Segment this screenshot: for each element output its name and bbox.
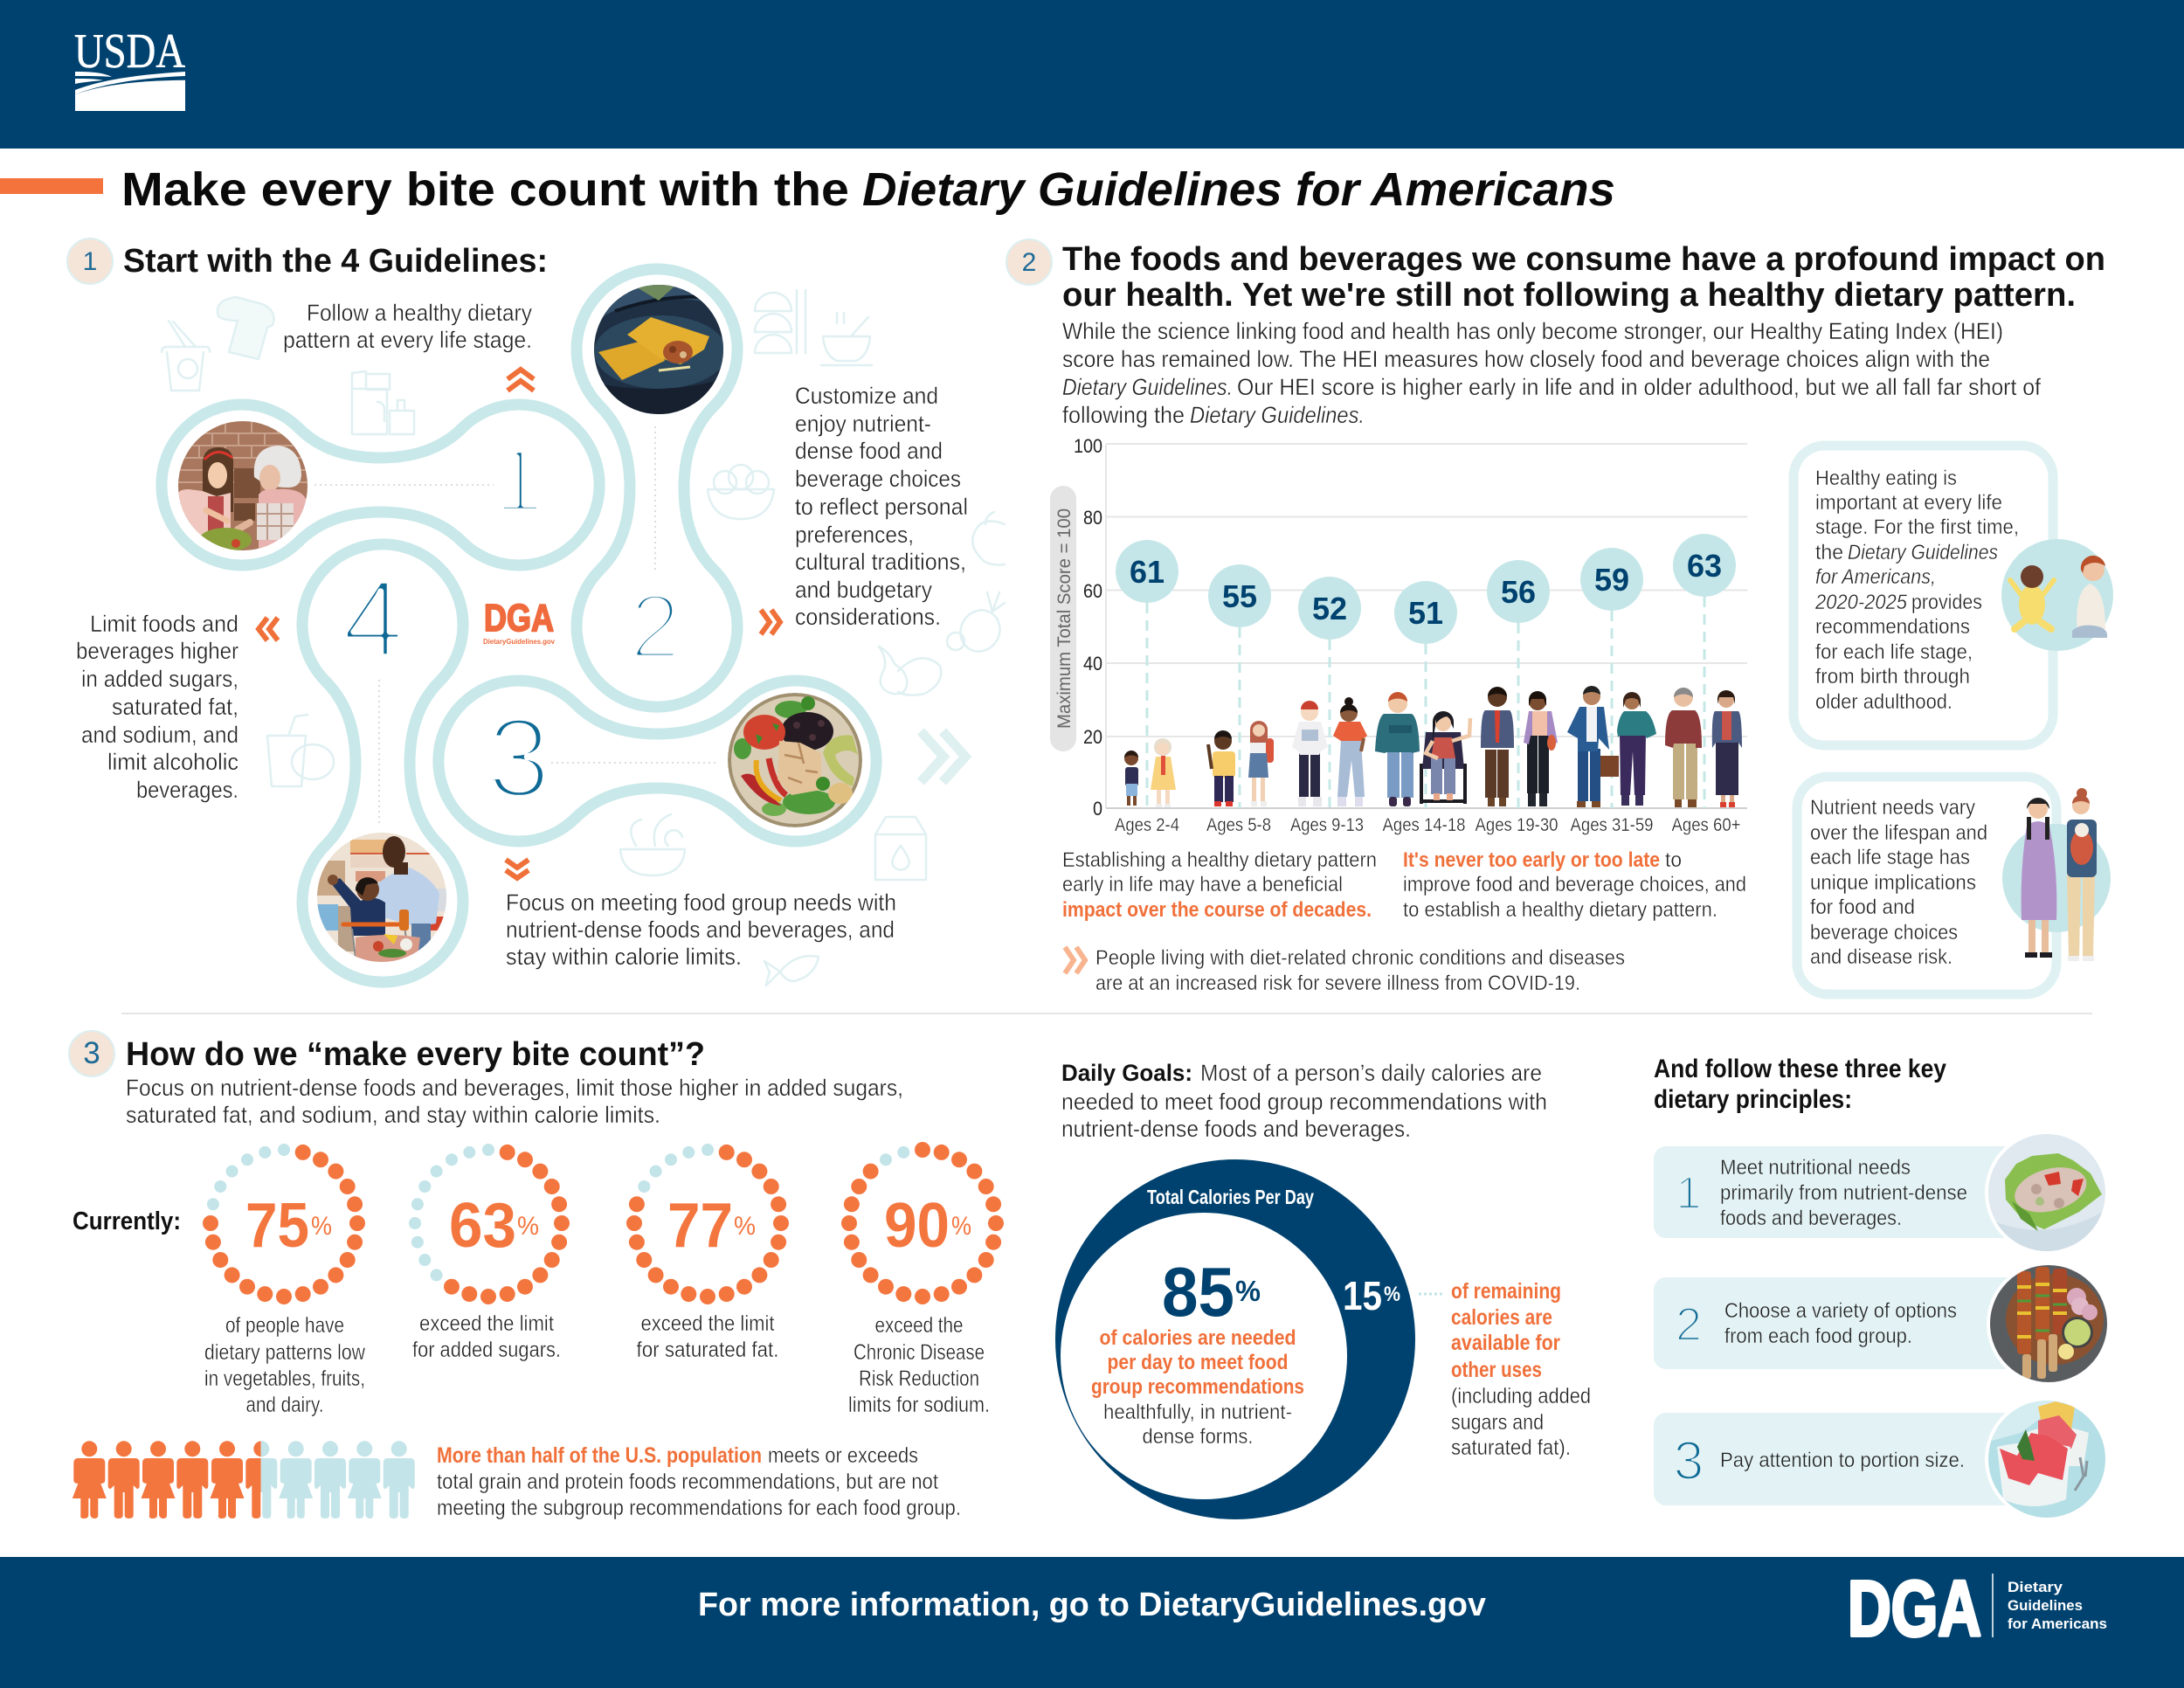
icon: pear and mango [879, 647, 941, 695]
heading: how do we make every bite count: How do we “make every bite count”? [126, 1036, 705, 1073]
text: guideline 2: enjoy nutrient- [795, 411, 931, 437]
text: guideline 1: pattern at every life stage. [283, 327, 532, 353]
score bubble 59: 59 [1594, 562, 1629, 598]
callout text: for Americans, [1815, 565, 1936, 589]
callout text [1814, 467, 2019, 714]
score bubble 52 [1298, 577, 1361, 640]
people: ages 19-30 [1481, 687, 1558, 806]
card: principle 1 [1654, 1131, 2109, 1255]
score bubble 56: 56 [1501, 574, 1536, 610]
text: never too early: to [1665, 848, 1682, 872]
y-axis title pill: Maximum Total Score = 100 [1054, 508, 1075, 729]
dot ring 90 percent: 90 [884, 1191, 950, 1261]
dot ring 90 percent: % [951, 1212, 971, 1241]
badge 1: 1 [83, 247, 97, 276]
card: principle 3 [1654, 1397, 2109, 1521]
text: more than half [437, 1443, 961, 1520]
intro paragraph: Dietary Guidelines. [1062, 374, 1233, 400]
badge 3 [69, 1031, 114, 1076]
heading: three key principles: dietary principles: [1654, 1085, 1852, 1114]
heading: three key principles: And follow these three key [1654, 1055, 1946, 1083]
footer DGA logo: for Americans [2008, 1615, 2107, 1632]
text: 85 percent explanation: dense forms. [1143, 1425, 1253, 1449]
y-axis tick labels: 60 [1083, 580, 1102, 602]
card: principle 2 [1654, 1262, 2111, 1386]
score bubble 56 [1487, 560, 1550, 623]
y-axis tick labels [1074, 435, 1102, 820]
subheading: saturated fat, and sodium, and stay within calorie limits. [126, 1102, 660, 1128]
dot ring 63 percent: 63 [449, 1191, 516, 1261]
number 3: 3 [487, 694, 550, 821]
card: principle 2: 2 [1676, 1298, 1702, 1351]
icon: groceries [352, 371, 414, 434]
score bubble 55: 55 [1222, 578, 1257, 614]
icon: yogurt cup [162, 321, 210, 391]
stat 15 percent: 15 [1343, 1273, 1382, 1318]
arrow: up chevrons [508, 370, 534, 391]
people: ages 5-8 [1208, 721, 1274, 806]
intro paragraph: Our HEI score is higher early in life and in older adulthood, but we all fall far short of [1237, 374, 2041, 400]
footer DGA logo: DGA [1848, 1566, 1981, 1653]
text: guideline 4 [76, 611, 238, 803]
footer banner [0, 1557, 2184, 1688]
text: guideline 2: to reflect personal [795, 494, 968, 520]
photo: lettuce wrap [1985, 1131, 2109, 1255]
subheading: Focus on nutrient-dense foods and beverages, limit those higher in added sugars, [126, 1075, 903, 1101]
text: remaining calories: other uses [1451, 1358, 1542, 1382]
icon: light orange chevrons [1065, 947, 1085, 973]
guideline loop 1 [162, 405, 599, 565]
panel: section 2 health impact [1006, 239, 2113, 995]
callout: nutrient needs vary [1797, 777, 2111, 994]
chart: calories circle [1055, 1159, 1415, 1519]
text: daily goals: nutrient-dense foods and beverages. [1061, 1116, 1411, 1142]
y-axis tick labels: 40 [1083, 653, 1102, 675]
caption: 63 percent: for added sugars. [412, 1338, 561, 1362]
card: principle 1: 1 [1676, 1168, 1701, 1219]
caption: 63 percent [412, 1311, 561, 1362]
y-axis tick labels: 100 [1074, 435, 1102, 457]
label: currently: Currently: [73, 1207, 181, 1235]
score bubble 61: 61 [1130, 554, 1165, 590]
photo: tamales [594, 285, 727, 414]
text: guideline 4: beverages. [136, 777, 238, 803]
text: remaining calories: calories are [1451, 1305, 1552, 1330]
callout text: for each life stage, [1815, 640, 1973, 664]
callout text: beverage choices [1810, 921, 1958, 944]
dot ring 75 percent: % [311, 1212, 332, 1241]
DGA centre logo: DGA [484, 597, 554, 640]
text: establishing a healthy pattern: Establishing a healthy dietary pattern [1062, 848, 1377, 872]
callout text: and disease risk. [1810, 945, 1952, 969]
callout text: older adulthood. [1815, 690, 1952, 714]
badge 2 [1006, 239, 1052, 285]
main title: Dietary Guidelines for Americans [862, 163, 1615, 216]
text: never too early: improve food and beverage choices, and [1403, 873, 1746, 896]
caption: 75 percent: in vegetables, fruits, [204, 1366, 365, 1391]
x-axis age labels: Ages 9-13 [1290, 815, 1364, 835]
callout text: important at every life [1815, 491, 2002, 515]
people: ages 9-13 [1292, 697, 1367, 806]
guideline loop 4 [302, 544, 463, 982]
callout: healthy eating life stages [1794, 446, 2113, 745]
dot ring 75 percent: 75 [245, 1191, 309, 1261]
callout text [1810, 796, 1987, 969]
people: ages 31-59 [1567, 686, 1656, 807]
footer DGA logo: Guidelines [2008, 1597, 2083, 1614]
text: more than half: More than half of the U.S. population [437, 1443, 762, 1468]
text: guideline 2: beverage choices [795, 466, 961, 492]
DGA centre logo: DietaryGuidelines.gov [483, 638, 556, 646]
icon: chevrons [921, 731, 965, 782]
number 4: 4 [342, 557, 404, 681]
intro paragraph: While the science linking food and health has only become stronger, our Healthy Eating Index (HEI) [1062, 318, 2003, 344]
icon: row of ten people [73, 1441, 415, 1519]
text: remaining calories: (including added [1451, 1384, 1591, 1408]
text: guideline 4: in added sugars, [81, 666, 238, 692]
photo: grandmother and girl cooking [178, 421, 308, 552]
card: principle 2: from each food group. [1724, 1325, 1912, 1348]
arrow: left chevrons [259, 618, 278, 640]
footer DGA logo [1848, 1566, 2107, 1653]
text: 85 percent explanation: of calories are needed [1099, 1326, 1296, 1350]
text: more than half: meeting the subgroup recommendations for each food group. [437, 1496, 961, 1520]
illustration: pregnant woman and mother with baby [2022, 788, 2097, 961]
faint food icons [162, 290, 1007, 986]
photo: watermelon cups [1985, 1397, 2109, 1521]
text: 85 percent explanation: group recommendations [1091, 1375, 1304, 1399]
caption: 75 percent [204, 1313, 366, 1417]
card: principle 3: 3 [1674, 1431, 1704, 1491]
stat 85 percent: 85 [1162, 1253, 1234, 1331]
icon: fish [764, 956, 819, 986]
dot ring 63 percent: % [517, 1212, 539, 1241]
caption: 77 percent: for saturated fat. [636, 1338, 779, 1362]
badge 1 [67, 239, 113, 284]
score bubble 55 [1208, 564, 1271, 627]
callout text: for food and [1810, 896, 1915, 919]
x-axis age labels [1115, 815, 1740, 835]
heading: profound impact: The foods and beverages we consume have a profound impact on [1062, 241, 2105, 278]
chart: HEI score by age [1050, 435, 1747, 835]
intro paragraph: following the [1062, 402, 1185, 428]
caption: 77 percent [636, 1311, 779, 1362]
icon: dumplings and chopsticks [755, 290, 805, 353]
arrow: down chevrons [506, 860, 529, 878]
icon: pineapple [947, 592, 1007, 659]
text: 85 percent explanation: per day to meet food [1108, 1351, 1288, 1374]
text: guideline 2: dense food and [795, 438, 943, 464]
score bubble 61 [1116, 540, 1178, 603]
text: 85 percent explanation: healthfully, in nutrient- [1103, 1401, 1292, 1424]
number 2: 2 [630, 576, 681, 678]
icon: milk carton [875, 817, 926, 880]
dot ring 77 percent: % [734, 1212, 756, 1241]
caption: 90 percent: Risk Reduction [859, 1366, 979, 1391]
card: principle 2: Choose a variety of options [1724, 1299, 1957, 1323]
card: principle 3: Pay attention to portion size. [1720, 1449, 1965, 1472]
text: guideline 1: Follow a healthy dietary [307, 300, 532, 326]
people: ages 60+ [1665, 688, 1742, 807]
heading: three key principles [1654, 1055, 1946, 1114]
orange title accent bar [0, 178, 103, 194]
text: guideline 2: Customize and [795, 383, 938, 409]
callout text: Nutrient needs vary [1810, 796, 1975, 820]
photo: salad bowl [728, 693, 862, 827]
text: COVID-19 note [1095, 946, 1625, 995]
caption: 75 percent: dietary patterns low [204, 1340, 366, 1365]
text: establishing a healthy pattern: impact over the course of decades. [1062, 898, 1372, 922]
x-axis age labels: Ages 14-18 [1382, 815, 1466, 835]
text: guideline 4: and sodium, and [81, 722, 238, 748]
text: never too early: to establish a healthy dietary pattern. [1403, 898, 1717, 922]
score bubble 51 [1394, 581, 1457, 644]
x-axis age labels: Ages 2-4 [1115, 815, 1179, 835]
card: principle 1: Meet nutritional needs [1720, 1156, 1911, 1180]
score bubble 51: 51 [1408, 595, 1443, 631]
panel: section 1 guidelines [67, 239, 1007, 986]
text: more than half: meets or exceeds [768, 1443, 918, 1468]
caption: 75 percent: of people have [225, 1313, 344, 1338]
badge 2: 2 [1022, 248, 1036, 277]
callout text: from birth through [1815, 665, 1970, 688]
panel: section 3 make every bite count [69, 1031, 2111, 1521]
text: daily goals: Daily Goals: [1061, 1060, 1192, 1086]
guideline loop 2 [577, 269, 737, 707]
caption: 77 percent: exceed the limit [641, 1311, 775, 1336]
y-axis tick labels: 20 [1083, 726, 1102, 748]
x-axis age labels: Ages 31-59 [1571, 815, 1653, 835]
callout text: stage. For the first time, [1815, 515, 2019, 539]
caption: 75 percent: and dairy. [246, 1393, 323, 1417]
text: more than half: total grain and protein foods recommendations, but are not [437, 1470, 938, 1494]
intro paragraph: score has remained low. The HEI measures how closely food and beverage choices align with the [1062, 346, 1990, 372]
text: guideline 2: considerations. [795, 604, 941, 630]
text: remaining calories: saturated fat). [1451, 1435, 1571, 1460]
text: guideline 4: beverages higher [76, 638, 238, 664]
text: guideline 4: Limit foods and [90, 611, 238, 637]
text: never too early [1403, 848, 1746, 922]
callout text: unique implications [1810, 871, 1976, 895]
USDA logo: USDA [74, 24, 185, 79]
callout text: recommendations [1815, 615, 1970, 639]
icon: drink and lemon [267, 715, 334, 786]
guideline loop 3 [439, 681, 876, 841]
icon: soup bowl [821, 313, 872, 365]
text: guideline 3: Focus on meeting food group needs with [506, 889, 896, 916]
callout text: the [1815, 541, 1843, 564]
text: never too early: It's never too early or too late [1403, 848, 1660, 872]
icon: apple [972, 512, 1005, 564]
callout text: over the lifespan and [1810, 821, 1987, 845]
dot ring 75 percent [211, 1150, 357, 1297]
text: guideline 4: limit alcoholic [107, 749, 238, 775]
photo: father and son shopping [317, 833, 446, 962]
score bubble 52: 52 [1312, 591, 1347, 626]
main title: Make every bite count with the [121, 163, 849, 216]
intro paragraph: Dietary Guidelines. [1190, 402, 1365, 428]
stat 15 percent: % [1384, 1283, 1400, 1306]
callout text: each life stage has [1810, 846, 1970, 869]
subheading [126, 1075, 903, 1128]
text: establishing a healthy pattern [1062, 848, 1377, 922]
person in wheelchair [1421, 711, 1470, 804]
text: guideline 2: and budgetary [795, 577, 932, 603]
callout text: provides [1911, 591, 1982, 614]
stat 85 percent: % [1235, 1275, 1261, 1307]
text: remaining calories: sugars and [1451, 1410, 1544, 1435]
text: guideline 3: stay within calorie limits. [506, 944, 742, 970]
x-axis age labels: Ages 19-30 [1475, 815, 1559, 835]
caption: 63 percent: exceed the limit [419, 1311, 554, 1336]
text: COVID-19 note: are at an increased risk for severe illness from COVID-19. [1095, 972, 1580, 995]
main title [121, 163, 1615, 216]
photo: skewers [1987, 1262, 2111, 1386]
text: guideline 1 [283, 300, 532, 353]
heading: profound impact: our health. Yet we're still not following a healthy dietary pattern. [1062, 277, 2076, 314]
caption: 90 percent: Chronic Disease [854, 1340, 985, 1365]
y-axis title pill [1050, 486, 1076, 751]
dot ring 90 percent [849, 1150, 996, 1297]
score bubble 63 [1673, 534, 1736, 597]
y-axis tick labels: 0 [1093, 798, 1102, 820]
text: establishing a healthy pattern: early in life may have a beneficial [1062, 873, 1343, 896]
text: daily goals [1061, 1060, 1547, 1142]
chart: calories circle: Total Calories Per Day [1147, 1186, 1314, 1208]
card: principle 1: foods and beverages. [1720, 1207, 1902, 1230]
illustration: baby and toddler [2010, 556, 2107, 638]
people: ages 2-4 [1124, 738, 1176, 807]
dot ring 77 percent [634, 1150, 781, 1297]
text: remaining calories [1451, 1279, 1591, 1460]
people: ages 14-18 [1375, 692, 1470, 806]
footer DGA logo: Dietary [2008, 1579, 2063, 1595]
intro paragraph [1062, 318, 2041, 428]
number 1: 1 [494, 431, 543, 530]
callout text: 2020-2025 [1814, 591, 1908, 614]
text: COVID-19 note: People living with diet-related chronic conditions and diseases [1095, 946, 1625, 970]
text: guideline 4: saturated fat, [112, 694, 238, 720]
heading: profound impact [1062, 241, 2105, 314]
arrow: right chevrons [761, 610, 780, 634]
score bubble 63: 63 [1687, 548, 1722, 584]
caption: 90 percent [848, 1313, 990, 1417]
footer call to action: For more information, go to DietaryGuidelines.gov [698, 1587, 1486, 1623]
callout text: Healthy eating is [1815, 467, 1957, 490]
text: guideline 2: cultural traditions, [795, 549, 966, 575]
caption: 90 percent: limits for sodium. [848, 1393, 990, 1417]
dot ring 63 percent [415, 1150, 562, 1297]
x-axis age labels: Ages 5-8 [1206, 815, 1271, 835]
text: guideline 3 [506, 889, 896, 970]
USDA logo [74, 24, 185, 111]
icon: bread [218, 297, 274, 359]
text: remaining calories: available for [1451, 1331, 1560, 1355]
icon: salad bowl [620, 814, 685, 875]
text: guideline 2: preferences, [795, 522, 914, 548]
icon: fruit bowl [708, 465, 774, 519]
dot ring 77 percent: 77 [667, 1191, 733, 1261]
score bubble 59 [1580, 548, 1643, 611]
callout text: Dietary Guidelines [1848, 541, 1998, 564]
x-axis age labels: Ages 60+ [1672, 815, 1740, 835]
text: daily goals: Most of a person’s daily calories are [1200, 1060, 1542, 1086]
heading: start with the 4 guidelines: Start with the 4 Guidelines: [123, 243, 548, 280]
text: remaining calories: of remaining [1451, 1279, 1561, 1304]
header banner [0, 0, 2184, 149]
badge 3: 3 [83, 1036, 100, 1070]
caption: 90 percent: exceed the [875, 1313, 963, 1338]
text: guideline 3: nutrient-dense foods and beverages, and [506, 917, 895, 943]
text: daily goals: needed to meet food group recommendations with [1061, 1089, 1547, 1115]
y-axis tick labels: 80 [1083, 507, 1102, 529]
text: 85 percent explanation [1091, 1326, 1304, 1449]
card: principle 1: primarily from nutrient-dense [1720, 1181, 1967, 1205]
text: guideline 2 [795, 383, 968, 630]
